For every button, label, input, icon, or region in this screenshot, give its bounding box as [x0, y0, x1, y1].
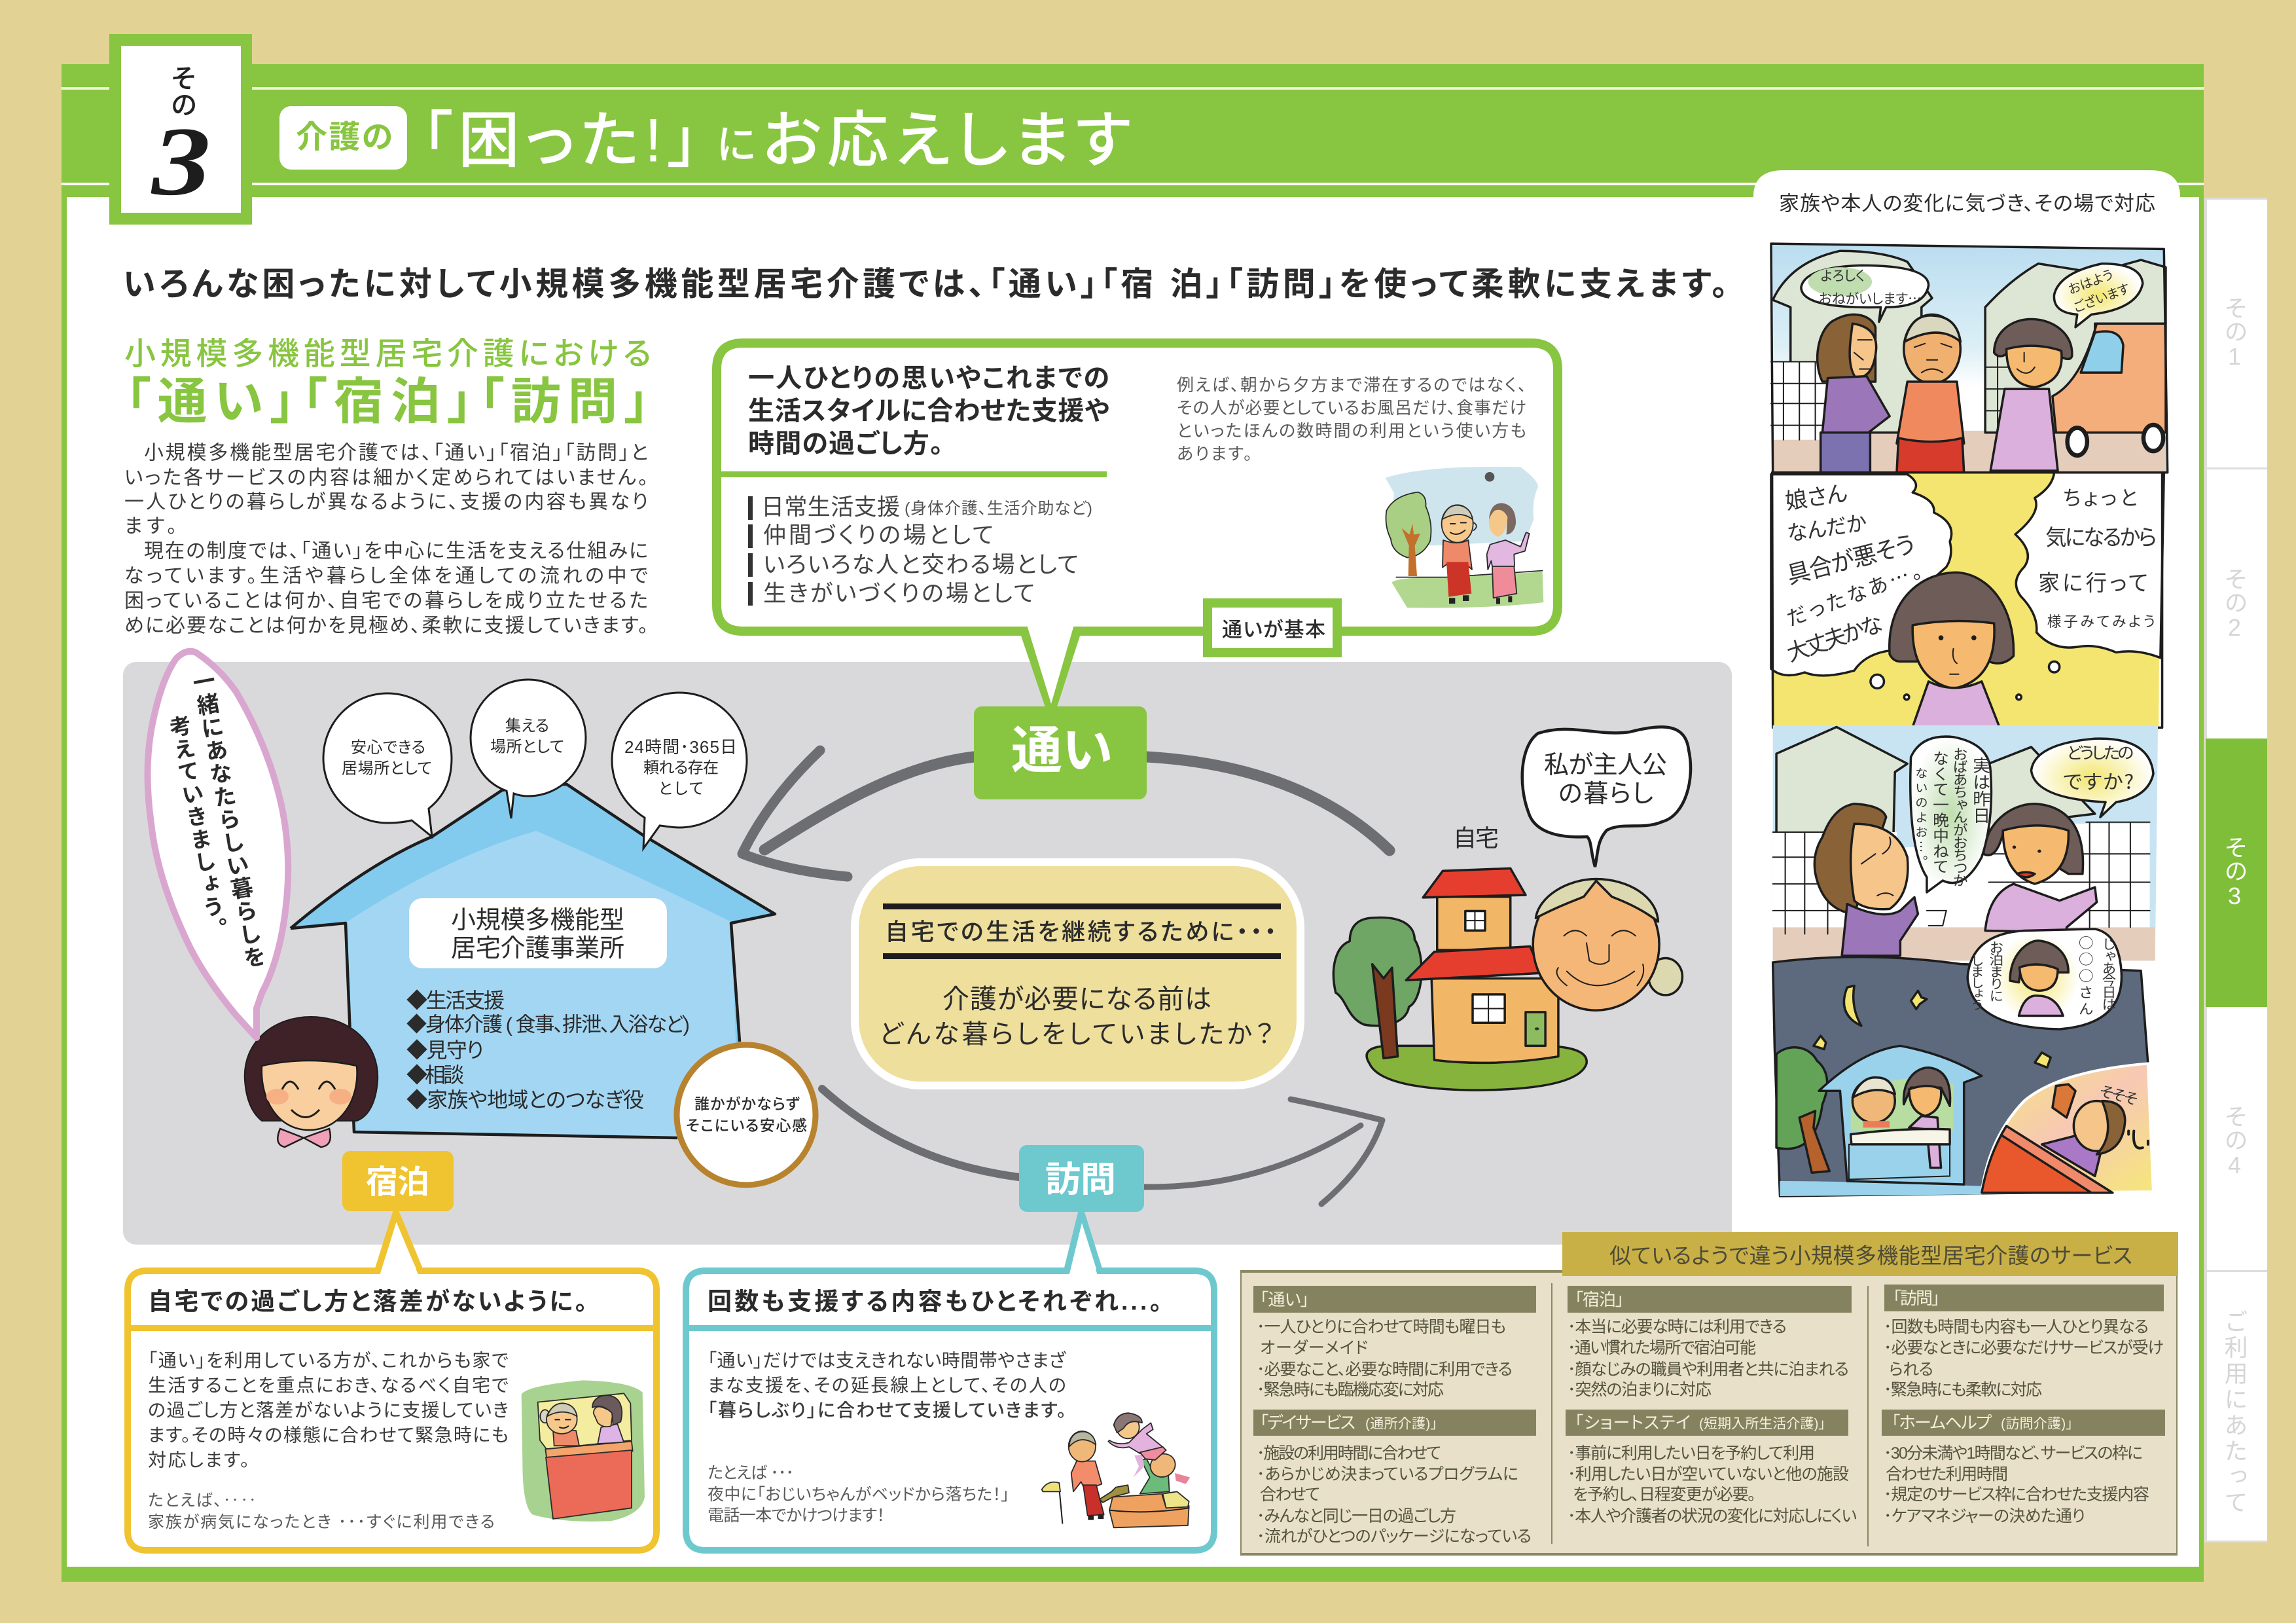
comic panel 3: おばあちゃんがおちつか: [1950, 747, 1971, 887]
illustration: two people outdoors: [1386, 467, 1543, 608]
yellow callout: shukuhaku: 対応します。: [148, 1450, 249, 1470]
teal callout: houmon: まな支援を、その延長線上として、その人の: [708, 1375, 1066, 1396]
tag: kayoi is the base: [1208, 603, 1337, 653]
column: kayoi: ･流れがひとつのパッケージになっている: [1257, 1527, 1532, 1546]
home and elderly woman illustration: [1333, 868, 1682, 1090]
column: kayoi: ･施設の利用時間に合わせて: [1257, 1444, 1441, 1463]
column: shukuhaku: [1566, 1286, 1857, 1525]
green callout: kayoi: 仲間づくりの場として: [763, 522, 994, 549]
column: kayoi: ･一人ひとりに合わせて時間も曜日も: [1257, 1318, 1506, 1336]
green callout: kayoi: その人が必要としているお風呂だけ、食事だけ: [1177, 398, 1526, 418]
comic panel 2: ちょっと: [2063, 481, 2138, 511]
speech bubble: safe place: 安心できる: [351, 739, 425, 757]
column: shukuhaku: ･突然の泊まりに対応: [1568, 1381, 1712, 1399]
teal callout: houmon: 電話一本でかけつけます！: [708, 1506, 885, 1525]
yellow callout: shukuhaku: の過ごし方と落差がないように支援していき: [148, 1400, 509, 1421]
green callout: kayoi: いろいろな人と交わる場として: [763, 553, 1079, 577]
care facility house: 居宅介護事業所: [451, 935, 624, 962]
care facility house: ◆身体介護 ( 食事、排泄、入浴など): [406, 1013, 690, 1036]
hou mon label: [1019, 1145, 1144, 1212]
illustration: visit at night: [1042, 1413, 1190, 1527]
comic panel 2: 気になるから: [2045, 520, 2157, 552]
pink speech bubble: [148, 651, 288, 1038]
hou mon label: 訪問: [1045, 1160, 1116, 1199]
comic panel 2: 家に行って: [2038, 566, 2148, 597]
speech bubble: 24 hours: 24時間･365日: [624, 737, 737, 757]
left intro body text: [124, 443, 648, 636]
teal callout: houmon: 回数も支援する内容もひとそれぞれ...。: [708, 1288, 1162, 1315]
column: shukuhaku: ･本当に必要な時には利用できる: [1568, 1318, 1787, 1336]
yellow callout: shukuhaku: 生活することを重点におき、なるべく自宅で: [148, 1375, 509, 1396]
illustration: sleeping in bed: [522, 1380, 645, 1522]
column: houmon: 「ホームヘルプ: [1892, 1413, 1992, 1432]
column: shukuhaku: ･事前に利用したい日を予約して利用: [1568, 1444, 1815, 1463]
column: shukuhaku: ･利用したい日が空いていないと他の施設: [1568, 1465, 1849, 1484]
column: shukuhaku: (短期入所生活介護)」: [1699, 1417, 1825, 1431]
column: shukuhaku: ･顔なじみの職員や利用者と共に泊まれる: [1568, 1360, 1849, 1379]
central question box: 自宅での生活を継続するために・・・: [885, 918, 1276, 945]
column: kayoi: 合わせて: [1260, 1486, 1320, 1504]
column: houmon: ･規定のサービス枠に合わせた支援内容: [1884, 1486, 2149, 1504]
column: houmon: (訪問介護)」: [2001, 1417, 2073, 1431]
column: houmon: ･回数も時間も内容も一人ひとり異なる: [1884, 1318, 2149, 1336]
home label: 自宅: [1453, 825, 1499, 851]
comic panel 3: 実は昨日: [1969, 757, 1994, 824]
green callout: kayoi: 一人ひとりの思いやこれまでの: [748, 364, 1109, 393]
green callout: kayoi: といったほんの数時間の利用という使い方も: [1177, 421, 1526, 441]
central question box: 介護が必要になる前は: [942, 984, 1211, 1014]
comic panel 4: [1773, 929, 2153, 1196]
section number badge: 3: [151, 107, 211, 215]
speech bubble: 24 hours: として: [658, 780, 704, 797]
speech bubble: 24 hours: [612, 693, 747, 848]
green callout: kayoi: 生活スタイルに合わせた支援や: [748, 397, 1109, 426]
care facility house: [291, 784, 775, 1138]
column: kayoi: オーダーメイド: [1260, 1339, 1368, 1357]
care facility house: ◆見守り: [406, 1038, 484, 1062]
comic panel 4: そそそ: [2097, 1079, 2141, 1109]
green callout: kayoi: (身体介護、生活介助など): [905, 500, 1092, 518]
section number badge: その: [166, 64, 196, 118]
comic panel 3: なくて一晩中ねて: [1929, 750, 1953, 874]
reassurance circle: 誰かがかならず: [694, 1095, 800, 1112]
left intro body text: いった各サービスの内容は細かく定められてはいません。: [124, 467, 648, 488]
section number badge: [109, 34, 252, 225]
teal callout: houmon: 「通い」だけでは支えきれない時間帯やさまざ: [708, 1350, 1067, 1371]
pink speech bubble: 一緒にあなたらしい暮らしを: [187, 668, 267, 970]
title: [279, 106, 1131, 174]
column: kayoi: 「デイサービス: [1260, 1413, 1355, 1432]
side index tabs: [2204, 198, 2267, 1542]
left intro heading: 小規模多機能型居宅介護における: [124, 337, 651, 372]
column: houmon: ･必要なときに必要なだけサービスが受け: [1884, 1339, 2164, 1357]
yellow callout: shukuhaku: [124, 1213, 660, 1550]
speech bubble: gathering place: 場所として: [490, 739, 564, 756]
left intro heading: [124, 337, 651, 429]
column: shukuhaku: ･本人や介護者の状況の変化に対応しにくい: [1568, 1507, 1857, 1525]
left intro body text: ます。: [124, 516, 177, 537]
tag: kayoi is the base: 通いが基本: [1222, 618, 1325, 642]
speech bubble: my own life: 私が主人公: [1544, 752, 1667, 779]
column: houmon: 「訪問」: [1893, 1288, 1940, 1308]
comic panel 3: どうしたの: [2067, 740, 2134, 763]
comic panel 2: 具合が悪そう: [1783, 525, 1918, 591]
left intro body text: 現在の制度では、「通い」を中心に生活を支える仕組みに: [144, 541, 648, 562]
column: kayoi: 「通い」: [1260, 1290, 1309, 1309]
speech bubble: gathering place: 集える: [505, 718, 549, 735]
comic panel 4: しましょう: [1967, 954, 1987, 1011]
speech bubble: 24 hours: 頼れる存在: [643, 759, 719, 776]
green callout: kayoi: 時間の過ごし方。: [748, 429, 943, 458]
yellow callout: shukuhaku: 自宅での過ごし方と落差がないように。: [148, 1288, 587, 1315]
column: houmon: 合わせた利用時間: [1886, 1465, 2008, 1484]
comic panel 3: ですか?: [2063, 767, 2134, 794]
side index tabs: その2: [2221, 567, 2248, 641]
kayoi label: [974, 706, 1147, 799]
central question box: どんな暮らしをしていましたか？: [879, 1020, 1274, 1049]
comic panel 2: 大丈夫かな: [1782, 606, 1886, 668]
left intro body text: 一人ひとりの暮らしが異なるように、支援の内容も異なり: [124, 491, 648, 513]
side index tabs: ご利用にあたって: [2221, 1309, 2248, 1514]
side index tabs: その4: [2221, 1104, 2248, 1178]
green callout: kayoi: 生きがいづくりの場として: [763, 581, 1035, 606]
teal callout: houmon: 「暮らしぶり」に合わせて支援していきます。: [708, 1400, 1066, 1421]
yellow callout: shukuhaku: ます。その時々の様態に合わせて緊急時にも: [148, 1425, 509, 1446]
comic panel 1: ございます: [2070, 278, 2132, 316]
care facility house: ◆家族や地域とのつなぎ役: [406, 1088, 644, 1112]
comic panel 4: ○○○さん: [2075, 936, 2097, 1016]
side index tabs: その3: [2221, 835, 2248, 909]
lead sentence: いろんな困ったに対して小規模多機能型居宅介護では、「通い」「宿 泊」「訪問」を使って柔軟に支えます。: [123, 266, 1728, 302]
services comparison panel: 似ているようで違う小規模多機能型居宅介護のサービス: [1609, 1244, 2132, 1267]
comic heading tab: 家族や本人の変化に気づき、その場で対応: [1779, 192, 2155, 215]
yellow callout: shukuhaku: たとえば、‥‥: [148, 1491, 257, 1510]
comic panel 4: じゃあ今日は: [2099, 938, 2119, 1011]
column: kayoi: ･緊急時にも臨機応変に対応: [1257, 1381, 1444, 1399]
comic panel 3: ないのよお…。: [1912, 767, 1931, 867]
column: shukuhaku: 「宿泊」: [1575, 1290, 1624, 1309]
yellow callout: shukuhaku: 家族が病気になったとき ･･･すぐに利用できる: [148, 1513, 495, 1531]
left intro body text: 困っていることは何か、自宅での暮らしを成り立たせるた: [124, 591, 648, 611]
column: kayoi: ･みんなと同じ一日の過ごし方: [1257, 1507, 1456, 1525]
left intro body text: 小規模多機能型居宅介護では、「通い」「宿泊」「訪問」と: [144, 443, 648, 464]
column: shukuhaku: 「ショートステイ: [1575, 1413, 1691, 1432]
comic panel 1: よろしく: [1821, 264, 1865, 284]
comic panel 2: [1771, 473, 2164, 727]
comic panel 2: なんだか: [1785, 506, 1868, 547]
title: 「困った!」: [422, 106, 698, 174]
kayoi label: 通い: [1011, 721, 1113, 779]
services comparison panel: [1240, 1232, 2178, 1556]
green callout: kayoi: 日常生活支援: [761, 495, 900, 520]
comic panel 2: だったなあ…。: [1782, 554, 1925, 632]
circular flow arrows: [742, 750, 1390, 1204]
comic panel 1: おねがいします…: [1819, 287, 1922, 307]
comic panels 1 and 2: [1771, 244, 2168, 727]
column: kayoi: [1253, 1286, 1536, 1546]
column: houmon: ･ケアマネジャーの決めた通り: [1884, 1507, 2085, 1525]
comic panel 2: 様子みてみよう: [2047, 610, 2155, 631]
comic panel 1: おはよう: [2065, 264, 2115, 298]
green callout: kayoi: [712, 343, 1558, 710]
care facility house: ◆相談: [406, 1063, 464, 1087]
side index tabs: その1: [2221, 296, 2248, 370]
teal callout: houmon: 夜中に「おじいちゃんがベッドから落ちた！」: [708, 1486, 1009, 1504]
title: 介護の: [296, 120, 393, 155]
column: kayoi: ･必要なこと、必要な時間に利用できる: [1257, 1360, 1513, 1379]
teal callout: houmon: [683, 1213, 1217, 1550]
green callout: kayoi: 例えば、朝から夕方まで滞在するのではなく、: [1177, 375, 1526, 395]
title: に: [717, 123, 756, 168]
left intro body text: めに必要なことは何かを見極め、柔軟に支援していきます。: [124, 615, 648, 636]
left intro heading: 「通い」「宿泊」「訪問」: [126, 374, 649, 429]
column: houmon: ･緊急時にも柔軟に対応: [1884, 1381, 2042, 1399]
speech bubble: safe place: [323, 693, 452, 837]
speech bubble: my own life: の暮らし: [1558, 780, 1653, 808]
reassurance circle: そこにいる安心感: [686, 1117, 807, 1134]
column: kayoi: (通所介護)」: [1365, 1417, 1437, 1431]
column: kayoi: ･あらかじめ決まっているプログラムに: [1257, 1465, 1518, 1484]
column: shukuhaku: を予約し､日程変更が必要｡: [1573, 1486, 1756, 1504]
pink speech bubble: 考えていきましょう。: [165, 714, 230, 942]
care facility house: ◆生活支援: [406, 989, 505, 1012]
speech bubble: safe place: 居場所として: [342, 759, 432, 778]
shukuhaku label: [342, 1151, 454, 1211]
comic panels 3 and 4: [1773, 725, 2158, 1196]
comic panel 1: [1771, 244, 2168, 475]
column: shukuhaku: ･通い慣れた場所で宿泊可能: [1568, 1339, 1756, 1357]
left intro body text: なっています。生活や暮らし全体を通しての流れの中で: [124, 566, 648, 587]
comic panel 2: 娘さん: [1783, 475, 1849, 516]
shukuhaku label: 宿泊: [366, 1165, 429, 1200]
column: houmon: [1882, 1285, 2165, 1525]
comic panel 4: お泊まりに: [1986, 941, 2007, 1002]
reassurance circle: [677, 1045, 816, 1185]
speech bubble: gathering place: [471, 680, 586, 818]
care facility house: 小規模多機能型: [451, 907, 624, 934]
speech bubble: my own life: [1522, 727, 1691, 867]
column: houmon: られる: [1889, 1360, 1933, 1379]
title: お応えします: [762, 106, 1131, 174]
central question box: [855, 862, 1300, 1085]
column: houmon: ･30分未満や1時間など､サービスの枠に: [1884, 1444, 2143, 1463]
comic panel 3: [1773, 725, 2158, 960]
grey diagram panel: [123, 662, 1732, 1245]
comic heading tab: [1753, 170, 2180, 223]
yellow callout: shukuhaku: 「通い」を利用している方が、これからも家で: [148, 1350, 509, 1371]
girl character: [245, 1017, 378, 1147]
green callout: kayoi: あります。: [1177, 444, 1252, 464]
teal callout: houmon: たとえば ･･･: [708, 1464, 794, 1482]
